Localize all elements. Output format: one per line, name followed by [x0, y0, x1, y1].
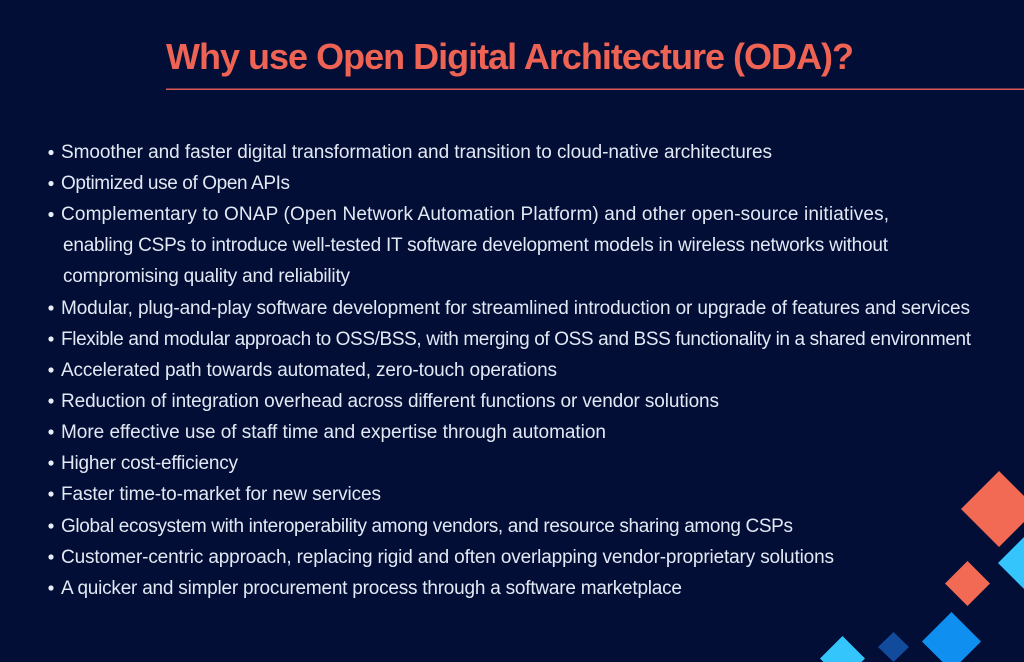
diamond: small coral: [945, 561, 990, 606]
bullet: modular plug-and-play: Modular, plug-and-play software development for streamlined introduction or upgrade of features and services: [61, 298, 970, 319]
title underline: [166, 88, 1024, 90]
diamond: cyan right edge: [998, 529, 1024, 597]
bullet: staff time: More effective use of staff time and expertise through automation: [61, 422, 606, 443]
bullet: complementary to ONAP: Complementary to ONAP (Open Network Automation Platform) and other open-source initiatives,: [61, 204, 889, 225]
diamond: dark blue: [878, 632, 909, 662]
diamond: mid blue: [922, 612, 981, 662]
decorative diamonds: [820, 471, 1024, 662]
bullet: digital transformation: Smoother and faster digital transformation and transition to cloud-native architectures: [61, 142, 772, 163]
bullet: time-to-market: Faster time-to-market for new services: [61, 484, 381, 505]
diamond: light cyan: [820, 636, 865, 662]
bullet: complementary to ONAP: enabling CSPs to introduce well-tested IT software development models in wireless networks without: [63, 235, 889, 256]
bullet: zero-touch operations: Accelerated path towards automated, zero-touch operations: [61, 360, 557, 381]
bullet: open APIs: Optimized use of Open APIs: [61, 173, 290, 194]
title: Why use Open Digital Architecture (ODA)?: [166, 36, 854, 77]
bullet list: [48, 142, 972, 599]
bullet: global ecosystem: Global ecosystem with interoperability among vendors, and resource sharing among CSPs: [61, 516, 793, 537]
bullet: customer-centric: Customer-centric approach, replacing rigid and often overlapping vendor-proprietary solutions: [61, 547, 834, 568]
bullet: complementary to ONAP: compromising quality and reliability: [63, 266, 350, 287]
bullet: integration overhead: Reduction of integration overhead across different functions or vendor solutions: [61, 391, 719, 412]
diamond: large coral: [961, 471, 1024, 547]
bullet: procurement: A quicker and simpler procurement process through a software marketplace: [61, 578, 682, 599]
bullet: cost-efficiency: Higher cost-efficiency: [61, 453, 238, 474]
bullet: OSS/BSS: Flexible and modular approach to OSS/BSS, with merging of OSS and BSS functionality in a shared environment: [61, 329, 972, 350]
bullet: complementary to ONAP: [48, 204, 889, 287]
